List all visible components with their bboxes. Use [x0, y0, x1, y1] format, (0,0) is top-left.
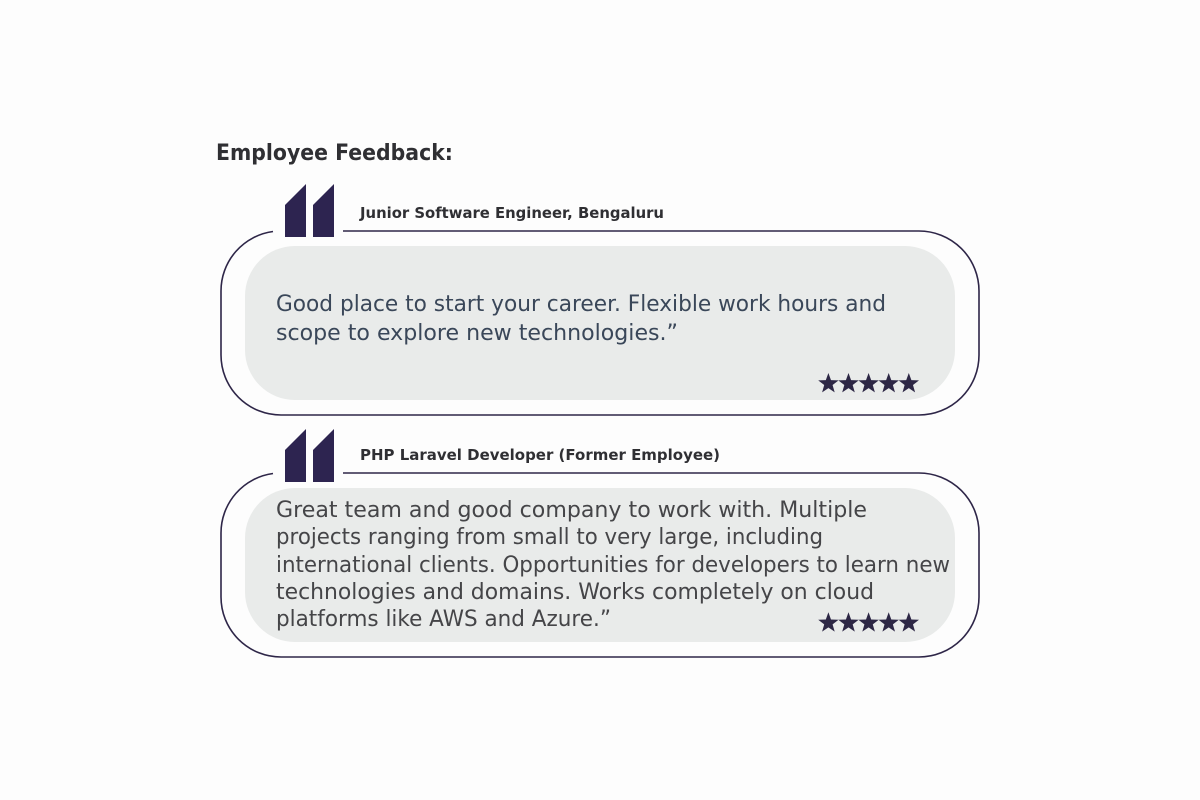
comment text: projects ranging from small to very large, including: [276, 525, 823, 550]
panel: second feedback card: [221, 429, 979, 657]
role heading: Junior Software Engineer, Bengaluru: [359, 204, 664, 222]
five star rating: [818, 612, 919, 632]
comment text: Good place to start your career. Flexible work hours and: [276, 292, 886, 317]
comment text: [276, 498, 950, 632]
card outline: [221, 231, 979, 415]
icon: quotation mark: [285, 184, 334, 237]
comment text: Great team and good company to work with. Multiple: [276, 498, 867, 523]
five star rating: [818, 373, 919, 392]
comment text: platforms like AWS and Azure.”: [276, 607, 611, 632]
comment text: scope to explore new technologies.”: [276, 321, 678, 346]
comment text: technologies and domains. Works completely on cloud: [276, 580, 874, 605]
comment background: [245, 488, 955, 642]
comment text: [276, 292, 886, 346]
role heading: PHP Laravel Developer (Former Employee): [360, 446, 720, 464]
title: Employee Feedback:: [216, 141, 453, 166]
card outline: [221, 473, 979, 657]
icon: quotation mark: [285, 429, 334, 482]
comment background: [245, 246, 955, 400]
panel: first feedback card: [221, 184, 979, 415]
comment text: international clients. Opportunities for developers to learn new: [276, 553, 950, 578]
